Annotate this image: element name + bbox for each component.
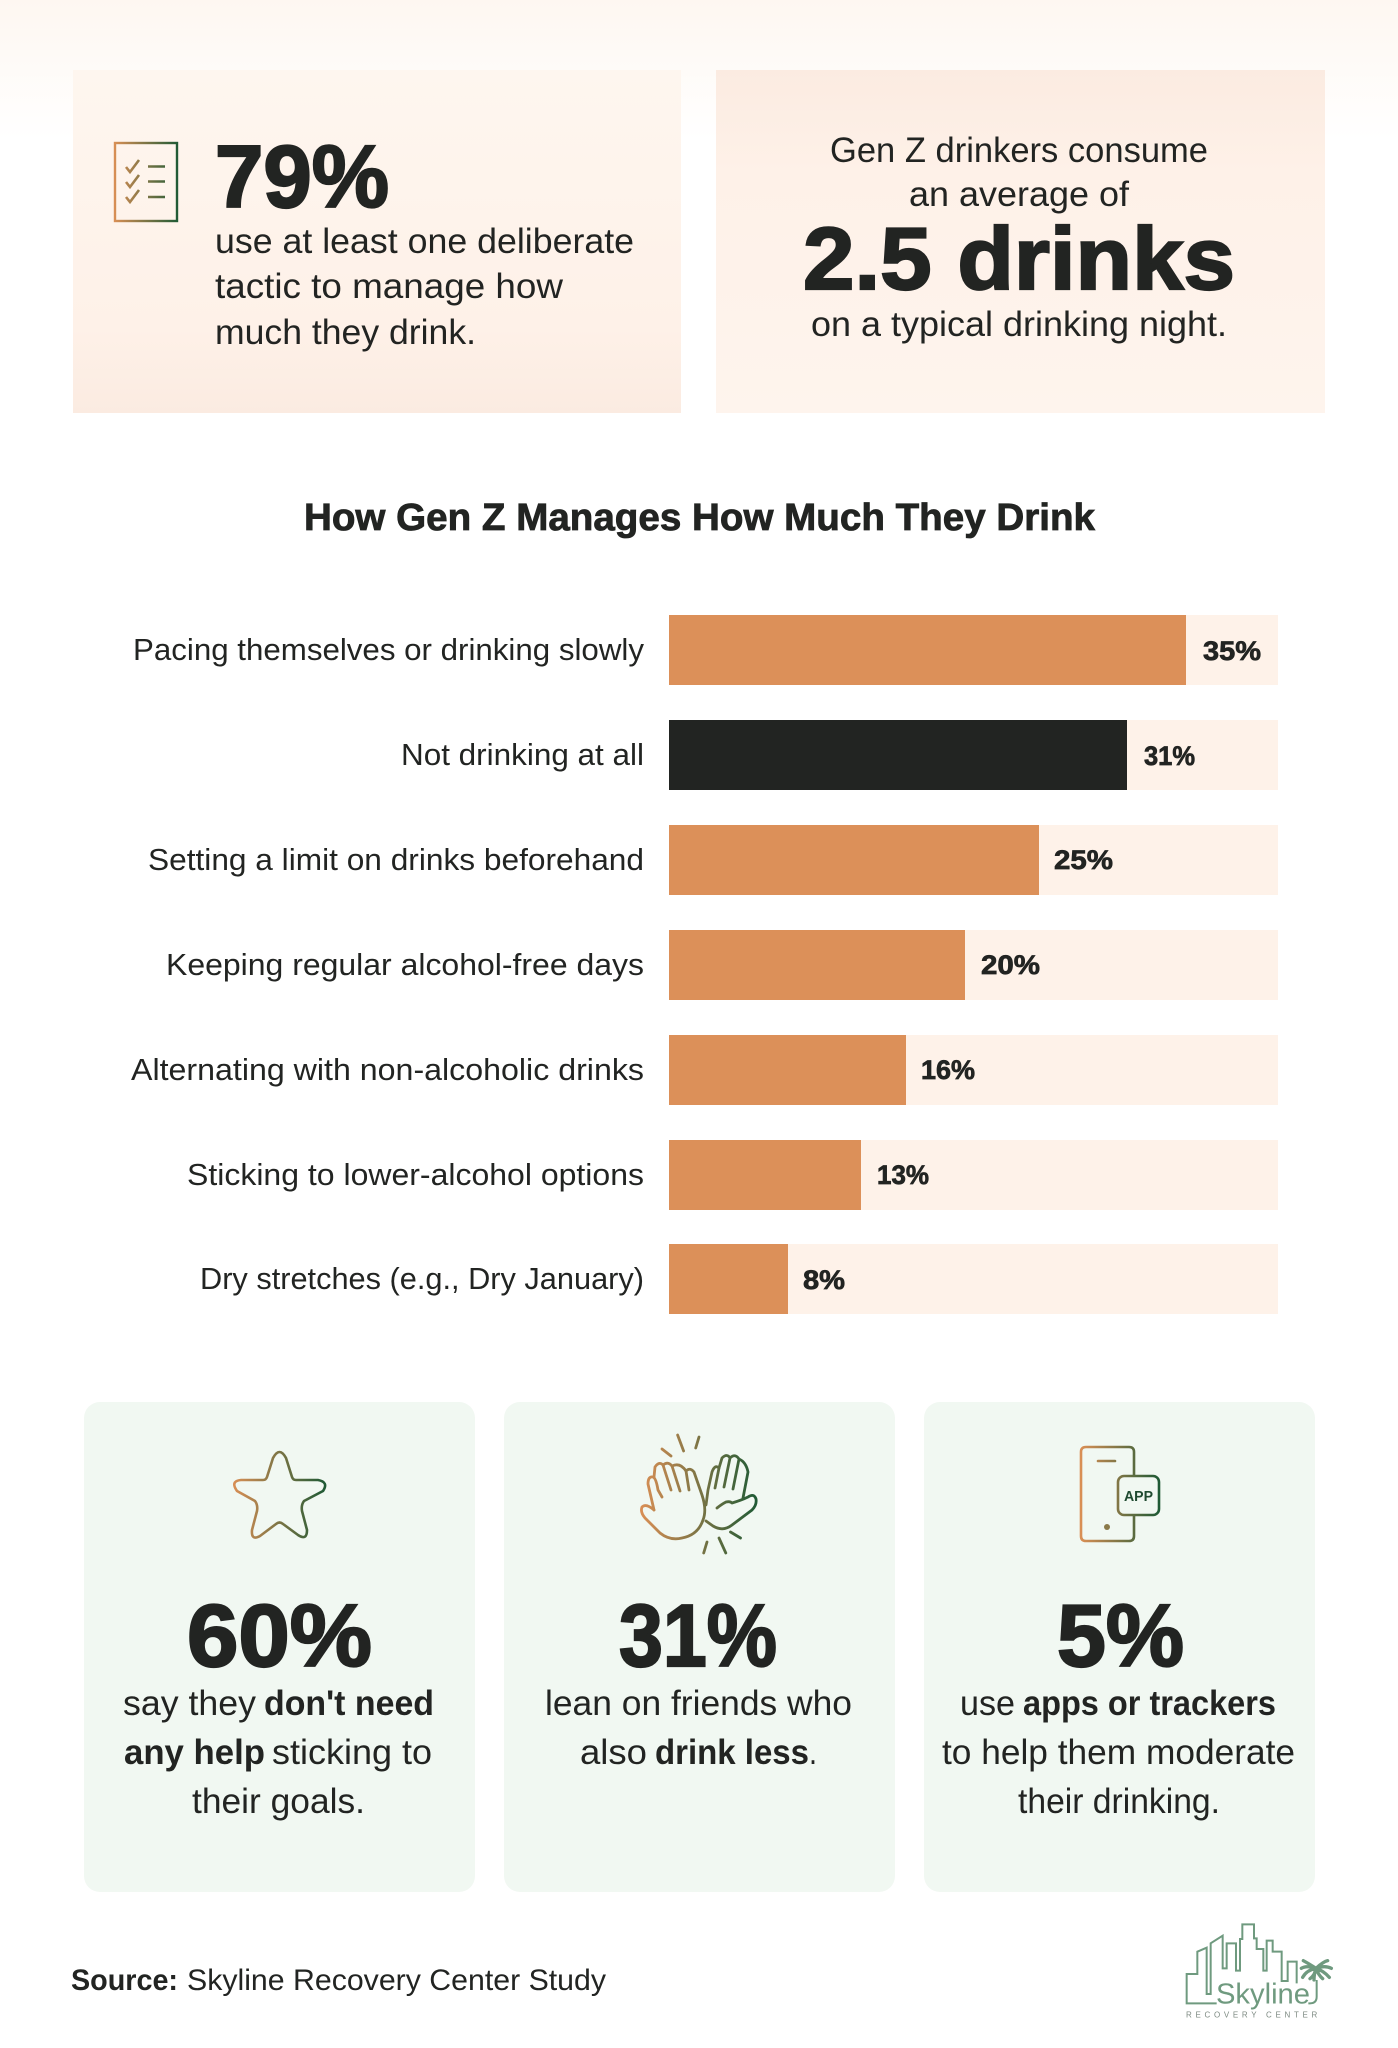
text: 79% description: tactic to manage how — [215, 267, 564, 306]
card: 5% — [924, 1402, 1315, 1892]
row: alcohol-free days 20% — [166, 930, 1278, 1000]
icon: high five — [641, 1435, 756, 1553]
text: 60% description — [123, 1684, 434, 1821]
row: alternating 16% — [131, 1035, 1278, 1105]
text: 60% description: don't need — [264, 1684, 434, 1723]
icon: checklist — [115, 143, 177, 221]
panel: 2.5 drinks stat — [716, 70, 1325, 413]
icon text: APP: APP — [1124, 1488, 1153, 1505]
text: 79% description: use at least one deliberate — [215, 222, 634, 261]
card: 60% — [84, 1402, 475, 1892]
logo: Skyline Recovery Center: Skyline — [1216, 1978, 1310, 2010]
text: 5% description: to help them moderate — [942, 1733, 1295, 1772]
row: limit 25%: 25% — [1054, 845, 1113, 875]
row: lower-alcohol 13%: Sticking to lower-alcohol options — [187, 1157, 644, 1192]
row: pacing 35% — [133, 615, 1278, 685]
bar chart: tactics — [131, 615, 1278, 1314]
text: 79% description — [215, 222, 634, 352]
panel: 79% stat — [73, 70, 681, 413]
row: lower-alcohol 13%: 13% — [877, 1160, 929, 1190]
row: pacing 35%: Pacing themselves or drinking slowly — [133, 632, 644, 667]
row: alternating 16%: 16% — [921, 1055, 975, 1085]
row: alcohol-free days 20%: 20% — [981, 950, 1040, 980]
row: pacing 35%: 35% — [1203, 636, 1261, 666]
text: 31% description: drink less — [655, 1733, 809, 1772]
logo: Skyline Recovery Center — [1186, 1924, 1331, 2019]
text: outro: on a typical drinking night. — [811, 305, 1227, 344]
heading: chart title: How Gen Z Manages How Much They Drink — [304, 497, 1096, 539]
text: 5% description — [942, 1684, 1295, 1821]
row: lower-alcohol 13% — [187, 1140, 1278, 1210]
text: intro — [830, 131, 1208, 214]
text: 60% description: any help — [124, 1733, 265, 1772]
row: dry stretches 8%: 8% — [803, 1265, 845, 1295]
source note: Skyline Recovery Center Study — [187, 1964, 606, 1997]
row: alcohol-free days 20%: Keeping regular alcohol-free days — [166, 947, 644, 982]
row: limit 25%: Setting a limit on drinks beforehand — [148, 842, 644, 877]
stat: 5%: 5% — [1057, 1586, 1184, 1685]
text: 5% description: apps or trackers — [1023, 1684, 1276, 1723]
stat: 2.5 drinks: 2.5 drinks — [803, 209, 1235, 308]
text: intro: Gen Z drinkers consume — [830, 131, 1208, 170]
row: dry stretches 8%: Dry stretches (e.g., Dry January) — [200, 1261, 644, 1296]
text: intro: an average of — [909, 175, 1129, 214]
text: 79% description: much they drink. — [215, 313, 476, 352]
row: not drinking 31% — [401, 720, 1278, 790]
text: 31% description: lean on friends who — [545, 1684, 852, 1723]
row: limit 25% — [148, 825, 1278, 895]
text: 31% description: . — [809, 1733, 817, 1772]
text: 5% description: their drinking. — [1018, 1782, 1220, 1821]
stat: 60%: 60% — [187, 1586, 372, 1685]
icon: star — [234, 1452, 325, 1538]
row: not drinking 31%: Not drinking at all — [401, 737, 644, 772]
row: not drinking 31%: 31% — [1144, 741, 1195, 771]
logo: Skyline Recovery Center: RECOVERY CENTER — [1186, 2010, 1318, 2019]
text: 31% description — [545, 1684, 852, 1772]
row: dry stretches 8% — [200, 1244, 1278, 1314]
text: 60% description: their goals. — [192, 1782, 365, 1821]
stat: 79%: 79% — [215, 127, 389, 226]
text: 60% description: say they — [123, 1684, 256, 1723]
text: 5% description: use — [960, 1684, 1015, 1723]
row: alternating 16%: Alternating with non-alcoholic drinks — [131, 1052, 644, 1087]
text: 31% description: also — [580, 1733, 647, 1772]
icon: phone with app — [1081, 1447, 1159, 1541]
text: 60% description: sticking to — [272, 1733, 432, 1772]
source note: Source: — [71, 1964, 178, 1997]
stat: 31%: 31% — [619, 1586, 777, 1685]
card: 31% — [504, 1402, 895, 1892]
